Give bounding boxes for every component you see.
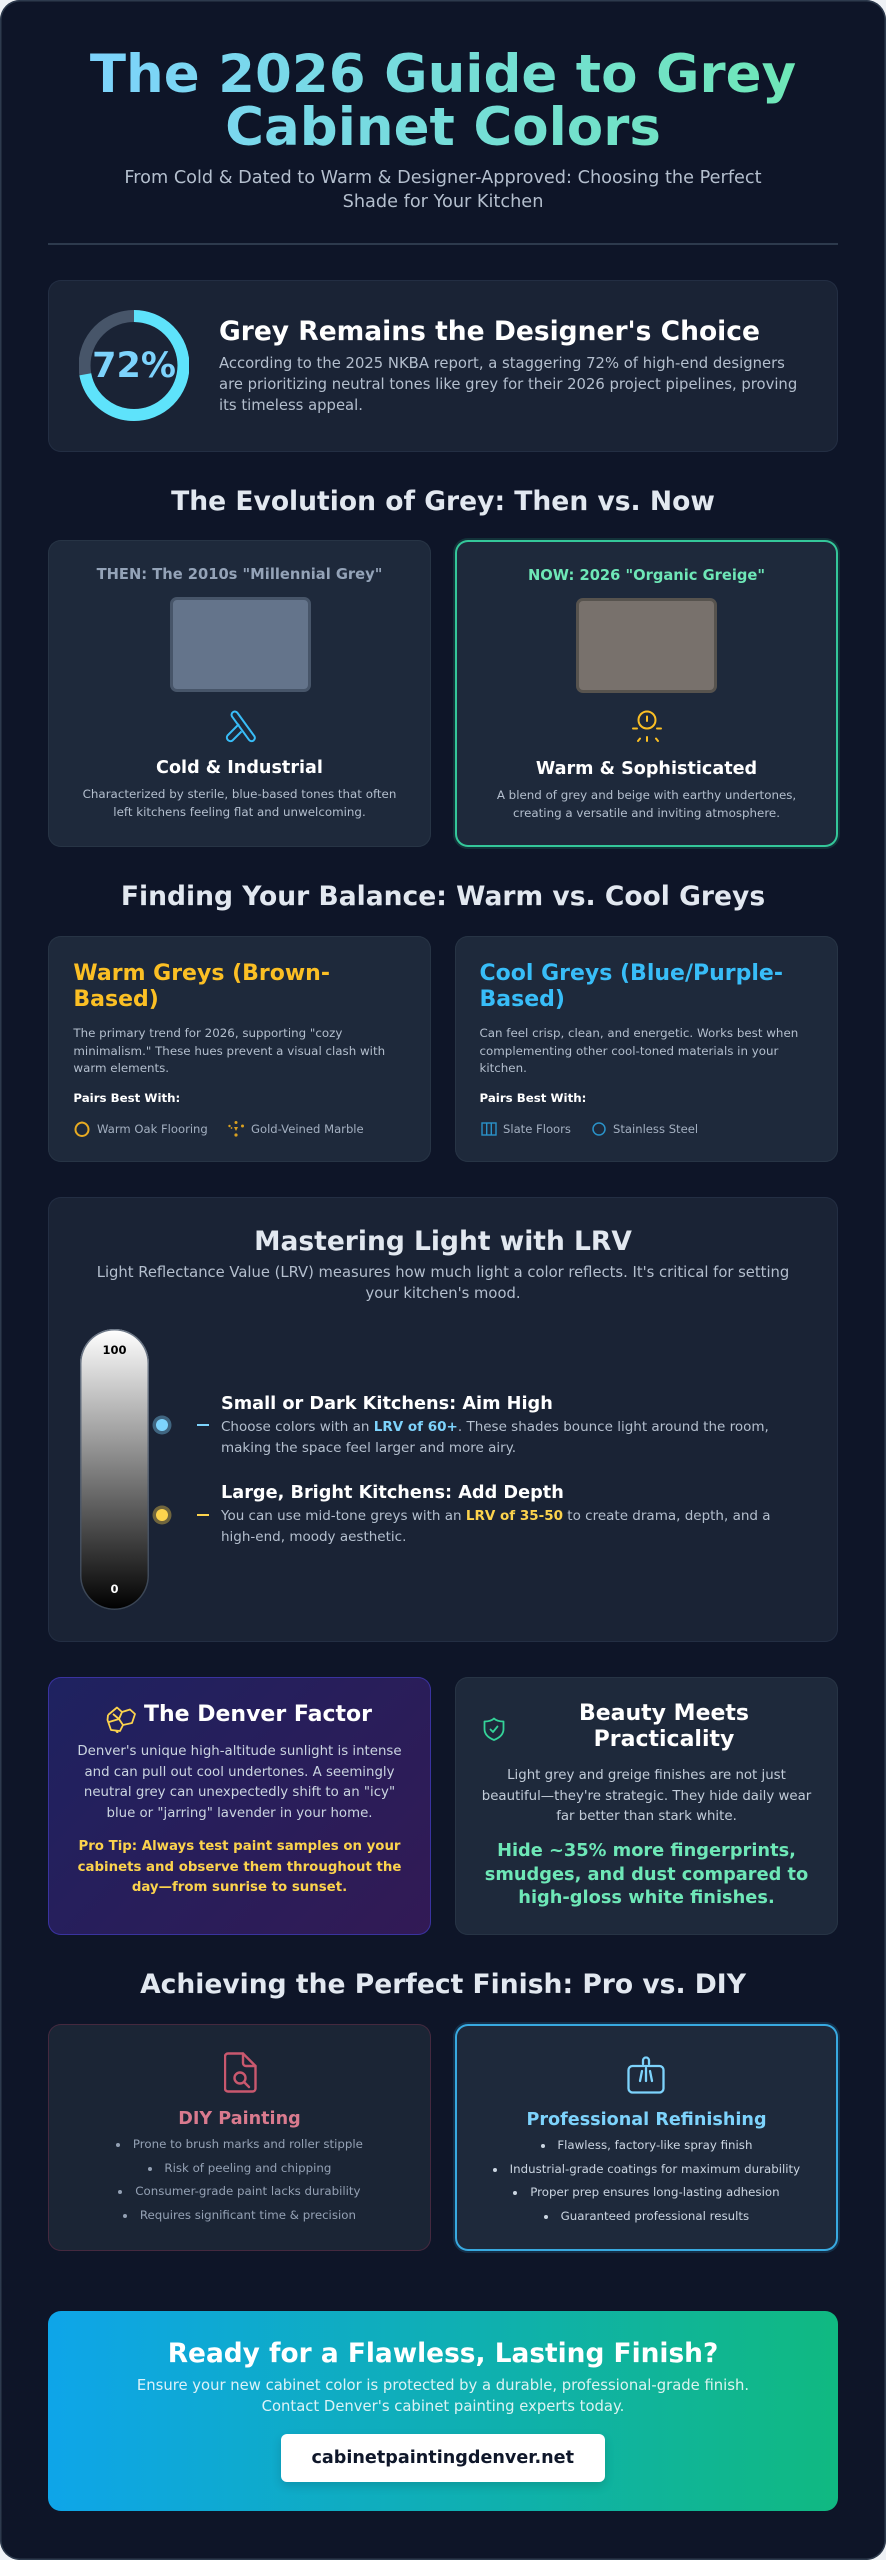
beauty heading: [579, 1701, 749, 1752]
CTA description: Contact Denver's cabinet painting experts today.: [262, 2398, 624, 2415]
warm description: minimalism." These hues prevent a visual clash with: [73, 1044, 385, 1058]
denver description: blue or "jarring" lavender in your home.: [106, 1806, 373, 1821]
DIY list: [116, 2137, 363, 2222]
heading: evolution of grey: The Evolution of Grey: Then vs. Now: [171, 486, 715, 517]
CTA button: [281, 2434, 604, 2482]
subtitle: From Cold & Dated to Warm & Designer-Approved: Choosing the Perfect: [124, 168, 762, 188]
LRV description: [97, 1264, 789, 1302]
DIY list: Risk of peeling and chipping: [164, 2161, 331, 2175]
now description: [497, 788, 796, 820]
cool description: Can feel crisp, clean, and energetic. Works best when: [480, 1026, 798, 1040]
beauty description: far better than stark white.: [556, 1809, 737, 1824]
pro list: Guaranteed professional results: [561, 2209, 749, 2223]
CTA heading: Ready for a Flawless, Lasting Finish?: [168, 2338, 718, 2369]
cool heading: [480, 961, 783, 1012]
tip: small kitchens: [152, 1394, 769, 1456]
panel: now: [455, 540, 838, 847]
icon: tools: [226, 710, 256, 742]
swatch: millennial grey: [170, 597, 311, 692]
LRV description: your kitchen's mood.: [365, 1285, 521, 1302]
now description: A blend of grey and beige with earthy undertones,: [497, 788, 796, 802]
beauty stat: high-gloss white finishes.: [518, 1887, 775, 1908]
icon: shield: [484, 1718, 504, 1741]
stat description: According to the 2025 NKBA report, a staggering 72% of high-end designers: [219, 354, 785, 372]
then description: left kitchens feeling flat and unwelcoming.: [113, 805, 366, 819]
tip heading: Large, Bright Kitchens: Add Depth: [221, 1483, 564, 1503]
pro title: Professional Refinishing: [526, 2110, 767, 2130]
tip: large kitchens: [152, 1483, 771, 1545]
DIY list: Prone to brush marks and roller stipple: [133, 2137, 363, 2151]
then title: Cold & Industrial: [156, 758, 323, 778]
then label: THEN: The 2010s "Millennial Grey": [97, 566, 382, 583]
title: The 2026 Guide to Grey: [90, 44, 796, 105]
marker: high LRV: [156, 1419, 168, 1431]
heading: warm vs cool: Finding Your Balance: Warm vs. Cool Greys: [121, 881, 765, 912]
panel: beauty meets practicality: [455, 1677, 838, 1935]
warm description: warm elements.: [73, 1061, 169, 1075]
beauty stat: [485, 1840, 808, 1908]
icon: slate: [481, 1122, 497, 1136]
pairs label: Pairs Best With:: [480, 1091, 586, 1105]
tip text: Choose colors with an LRV of 60+. These shades bounce light around the room,: [221, 1419, 769, 1435]
panel: professional refinishing: [455, 2024, 838, 2251]
panel: LRV: [48, 1197, 838, 1642]
marker: mid LRV: [156, 1509, 168, 1521]
panel: cool greys: [455, 936, 838, 1162]
subtitle: Shade for Your Kitchen: [343, 192, 543, 212]
stat heading: Grey Remains the Designer's Choice: [219, 316, 760, 346]
beauty description: [482, 1768, 812, 1824]
now label: NOW: 2026 "Organic Greige": [528, 567, 765, 584]
pro tip: cabinets and observe them throughout the: [78, 1860, 401, 1874]
panel: denver factor: [48, 1677, 431, 1935]
CTA description: Ensure your new cabinet color is protected by a durable, professional-grade finish.: [137, 2377, 749, 2394]
pro tip: [78, 1839, 401, 1895]
scale top: 100: [102, 1343, 126, 1357]
LRV description: Light Reflectance Value (LRV) measures how much light a color reflects. It's critical for setting: [97, 1264, 789, 1281]
warm description: The primary trend for 2026, supporting "cozy: [73, 1026, 342, 1040]
warm heading: Warm Greys (Brown-: [73, 961, 330, 986]
beauty description: beautiful—they're strategic. They hide daily wear: [482, 1789, 811, 1804]
icon: mountains: [106, 1706, 136, 1733]
now description: creating a versatile and inviting atmosphere.: [513, 806, 780, 820]
denver heading: The Denver Factor: [144, 1702, 372, 1727]
icon: oak: [74, 1122, 90, 1137]
panel: then: [48, 540, 431, 847]
stat description: [219, 354, 797, 414]
pro tip: day—from sunrise to sunset.: [132, 1880, 347, 1895]
icon: warm light: [632, 710, 662, 742]
LRV heading: Mastering Light with LRV: [254, 1226, 632, 1257]
CTA description: [137, 2377, 749, 2415]
warm description: [73, 1026, 385, 1075]
pro list: Industrial-grade coatings for maximum durability: [510, 2162, 800, 2176]
denver description: [77, 1744, 402, 1821]
panel: warm greys: [48, 936, 431, 1162]
swatch: organic greige: [576, 598, 717, 693]
title: [60, 48, 826, 154]
pro tip: Pro Tip: Always test paint samples on your: [78, 1839, 401, 1854]
cool heading: Based): [480, 987, 565, 1012]
DIY list: Consumer-grade paint lacks durability: [135, 2184, 361, 2198]
cool description: complementing other cool-toned materials in your: [480, 1044, 778, 1058]
DIY list: Requires significant time & precision: [140, 2208, 356, 2222]
stat description: are prioritizing neutral tones like grey for their 2026 project pipelines, proving: [219, 376, 797, 392]
beauty stat: smudges, and dust compared to: [485, 1864, 808, 1885]
tip text: making the space feel larger and more airy.: [221, 1440, 516, 1456]
beauty stat: Hide ~35% more fingerprints,: [497, 1840, 796, 1861]
cool description: [480, 1026, 798, 1075]
icon: spray: [627, 2056, 665, 2094]
tip text: You can use mid-tone greys with an LRV of 35-50 to create drama, depth, and a: [221, 1508, 771, 1524]
donut chart: 72%: [79, 310, 189, 421]
then description: Characterized by sterile, blue-based tones that often: [83, 787, 396, 801]
cool heading: Cool Greys (Blue/Purple-: [480, 961, 783, 986]
panel: DIY painting: [48, 2024, 431, 2251]
icon: document search: [224, 2052, 257, 2093]
donut chart: 72%: 72%: [92, 346, 176, 386]
DIY title: DIY Painting: [178, 2109, 301, 2129]
heading: pro vs diy: Achieving the Perfect Finish: Pro vs. DIY: [140, 1969, 746, 2000]
title: Cabinet Colors: [225, 97, 661, 158]
warm heading: Based): [73, 987, 159, 1012]
pair: oak: Warm Oak Flooring: [97, 1122, 208, 1136]
panel: call to action: [48, 2311, 838, 2511]
subtitle: [124, 168, 762, 212]
CTA button: cabinetpaintingdenver.net: [311, 2448, 574, 2468]
stat description: its timeless appeal.: [219, 396, 363, 414]
pair: slate: Slate Floors: [503, 1122, 571, 1136]
pair: steel: Stainless Steel: [613, 1122, 698, 1136]
tip text: [221, 1508, 771, 1545]
denver description: neutral grey can unexpectedly shift to an "icy": [84, 1785, 395, 1800]
warm heading: [73, 961, 330, 1012]
pro list: Proper prep ensures long-lasting adhesion: [530, 2185, 780, 2199]
panel: 72% stat: [48, 280, 838, 452]
denver description: and can pull out cool undertones. A seemingly: [84, 1765, 395, 1780]
pro list: [493, 2138, 800, 2223]
tip text: [221, 1419, 769, 1456]
beauty heading: Practicality: [594, 1727, 734, 1752]
tip heading: Small or Dark Kitchens: Aim High: [221, 1394, 553, 1414]
beauty heading: Beauty Meets: [579, 1701, 749, 1726]
now title: Warm & Sophisticated: [536, 759, 757, 779]
icon: steel: [592, 1122, 606, 1136]
LRV gradient scale: [80, 1329, 149, 1610]
pairs label: Pairs Best With:: [73, 1091, 180, 1105]
tip text: high-end, moody aesthetic.: [221, 1529, 406, 1545]
then description: [83, 787, 396, 819]
scale bottom: 0: [110, 1582, 118, 1596]
pro list: Flawless, factory-like spray finish: [557, 2138, 752, 2152]
beauty description: Light grey and greige finishes are not just: [507, 1768, 786, 1783]
cool description: kitchen.: [480, 1061, 527, 1075]
denver description: Denver's unique high-altitude sunlight is intense: [77, 1744, 402, 1759]
icon: marble: [228, 1121, 244, 1137]
pair: marble: Gold-Veined Marble: [251, 1122, 364, 1136]
